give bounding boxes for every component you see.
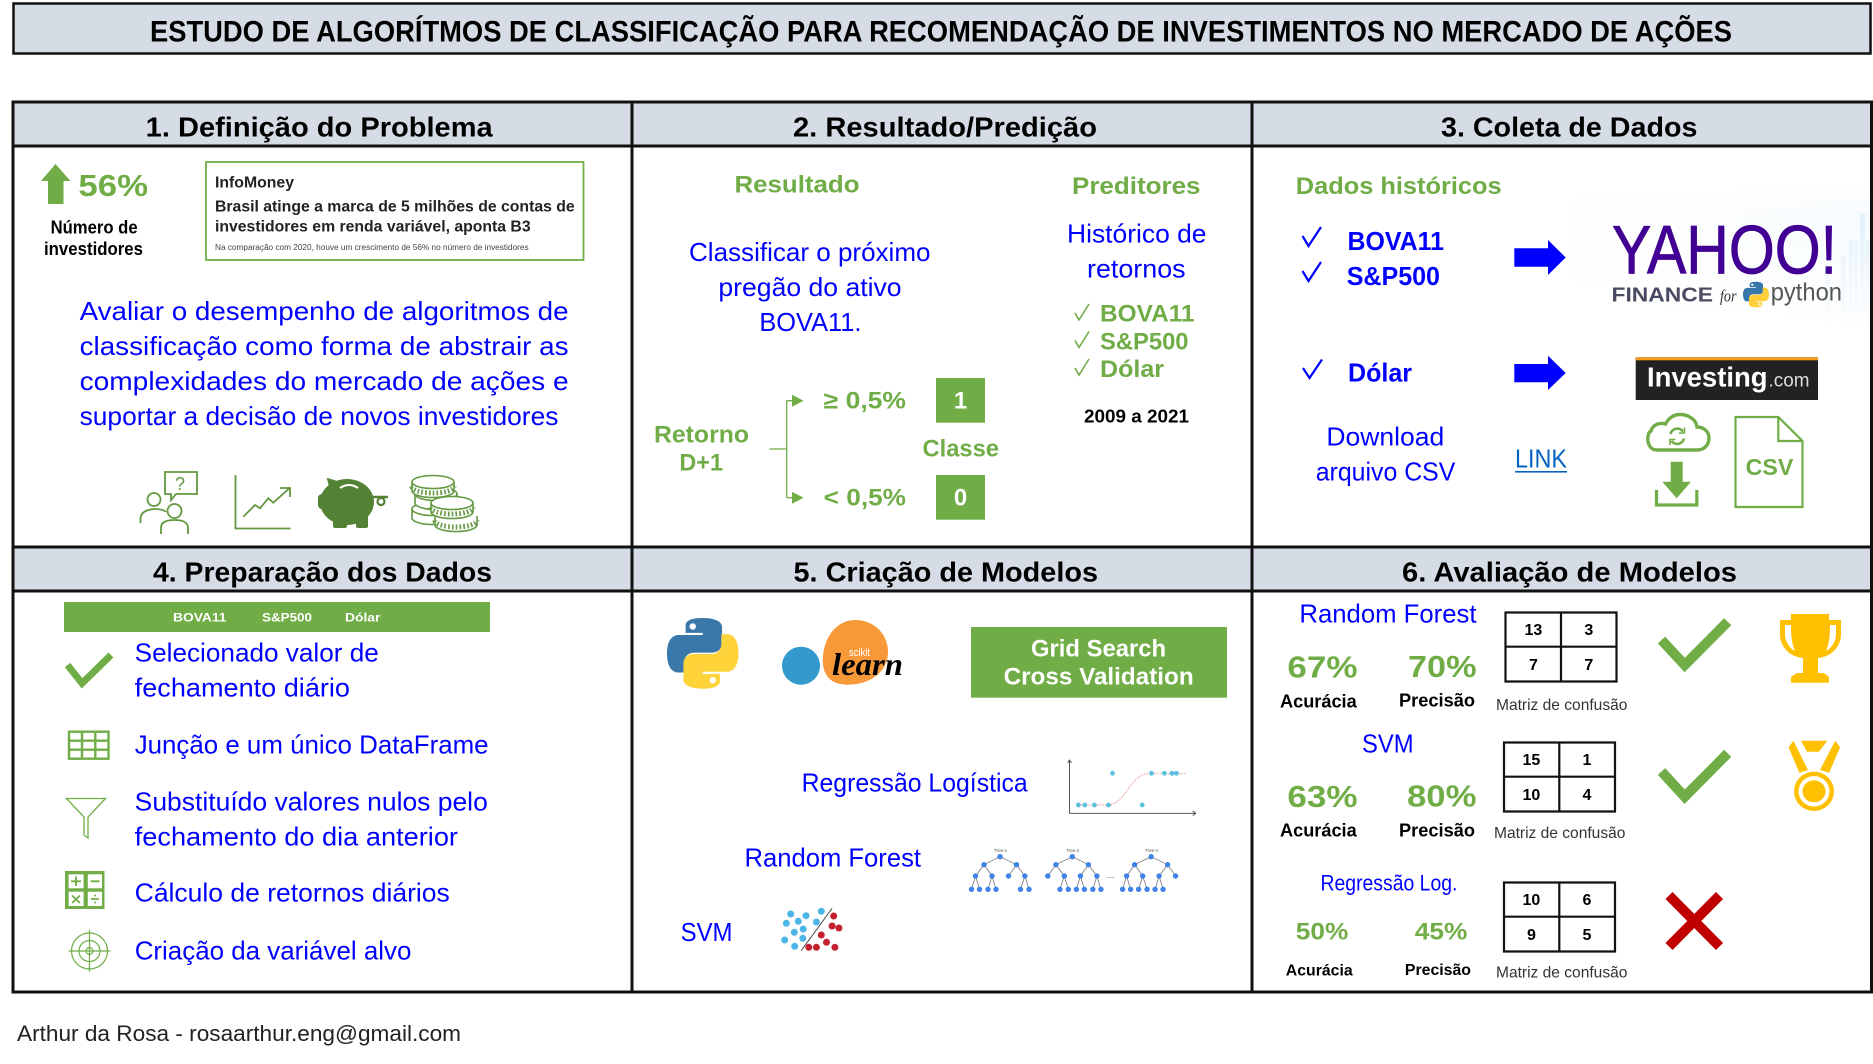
column bar: S&P500 [262,611,312,625]
objective text: suportar a decisão de novos investidores [80,401,558,431]
class box 1 [936,378,985,423]
yahoo backdrop [1572,186,1870,330]
objective text: complexidades do mercado de ações e [80,366,569,396]
arrow: to yahoo [1514,240,1566,275]
predictors checklist [1075,301,1194,383]
confusion matrix: regressão log: 5 [1583,927,1592,944]
outcome text: Classificar o próximo [689,237,930,267]
news callout: Brasil atinge a marca de 5 milhões de contas de [215,199,575,216]
step: substituído: Substituído valores nulos pelo [135,787,488,817]
class label: Classe [922,436,999,463]
panel: 4. preparação dos dados [13,547,632,992]
step: cálculo: Cálculo de retornos diários [135,878,450,908]
objective text: classificação como forma de abstrair as [80,331,569,361]
grid search box [971,627,1227,698]
predictors text: Histórico de [1067,218,1206,248]
news callout [206,162,584,260]
heading: 3. Coleta de Dados [1441,112,1697,143]
model: random forest [1280,599,1477,712]
class box 1: 1 [954,387,967,414]
icon: investors question: ? [175,474,185,494]
stat: 56%: 56% [78,168,148,203]
objective text [80,296,569,431]
column bar [64,602,490,632]
title: ESTUDO DE ALGORÍTMOS DE CLASSIFICAÇÃO PARA RECOMENDAÇÃO DE INVESTIMENTOS NO MERCADO DE AÇÕES [150,15,1732,49]
model: random forest: Precisão [1399,691,1475,711]
column bar: BOVA11 [173,611,227,625]
confusion matrix: regressão log: Matriz de confusão [1496,964,1627,981]
outcome text: BOVA11. [759,307,861,337]
model: random forest: Random Forest [1299,599,1477,629]
icon: big check [1662,622,1728,665]
download text [1316,422,1456,487]
logo: yahoo finance for python: YAHOO! [1612,211,1837,288]
step: selecionado: fechamento diário [135,673,350,703]
yahoo sources [1302,226,1444,291]
label: svm: SVM [681,917,732,947]
icon: download [1656,462,1697,505]
class box 0: 0 [954,484,967,511]
step: criação: Criação da variável alvo [135,935,411,965]
chart: random forest trees: Tree-2 [1066,848,1080,853]
predictors text: retornos [1087,253,1186,283]
icon: trophy [1780,614,1841,683]
confusion matrix: random forest [1496,612,1627,714]
chart: logistic curve [1068,760,1196,816]
outcome text: pregão do ativo [718,272,902,302]
chart: random forest trees: Tree-1 [994,848,1008,853]
confusion matrix: svm: Matriz de confusão [1494,825,1625,842]
chart: random forest trees [969,848,1178,892]
icon: check [68,655,111,683]
icon: medal [1789,741,1840,811]
heading: 6. Avaliação de Modelos [1402,557,1737,588]
confusion matrix: svm [1494,742,1625,842]
target label [654,422,749,476]
arrow: to investing [1514,356,1566,390]
yahoo sources: BOVA11 [1348,226,1444,256]
download text: arquivo CSV [1316,457,1456,487]
icon: csv file: CSV [1746,454,1794,480]
logo: python [667,618,738,689]
confusion matrix: regressão log: 6 [1583,892,1592,909]
predictors checklist: Dólar [1100,356,1164,383]
panel: 2. resultado/predição [632,102,1252,547]
predictors text [1067,218,1206,283]
model: svm: 63% [1287,779,1358,814]
step: junção: Junção e um único DataFrame [135,729,489,759]
logo: yahoo finance for python: for [1720,287,1737,306]
model: random forest: 67% [1287,650,1358,685]
icon: coins [412,476,477,532]
stat label [44,217,143,259]
model: random forest: Acurácia [1280,692,1358,712]
footer: Arthur da Rosa - rosaarthur.eng@gmail.com [17,1021,461,1046]
threshold labels [824,387,906,511]
target label: D+1 [679,449,723,476]
download text: Download [1326,422,1444,452]
logo: yahoo finance for python: python [1771,279,1842,307]
panel: 1. definição do problema [13,102,632,547]
chart: random forest trees: Tree-n [1145,848,1159,853]
objective text: Avaliar o desempenho de algoritmos de [80,296,569,326]
grid search box: Grid Search [1031,636,1166,663]
period: 2009 a 2021 [1084,407,1189,427]
confusion matrix: random forest: 3 [1584,622,1593,639]
arrow: branch [769,395,804,504]
model: random forest: 70% [1408,649,1476,684]
model: regressão log: 50% [1296,918,1348,945]
model: svm: Acurácia [1280,821,1358,841]
model: regressão log: Regressão Log. [1320,871,1457,896]
confusion matrix: regressão log [1496,882,1627,981]
step: substituído [135,787,488,852]
icon: cloud sync [1648,414,1709,450]
icon: up arrow [41,164,70,204]
confusion matrix: svm: 15 [1523,752,1540,769]
panel: 5. criação de modelos [632,547,1252,992]
confusion matrix: random forest: Matriz de confusão [1496,697,1627,714]
confusion matrix: svm: 1 [1583,752,1592,769]
model: svm: SVM [1362,729,1414,759]
logo: investing.com: Investing [1647,362,1768,393]
confusion matrix: svm: 4 [1583,787,1592,804]
subheading: Dados históricos [1296,173,1502,200]
news callout: Na comparação com 2020, houve um crescimento de 56% no número de investidores [215,243,529,252]
logo: scikit-learn: scikit [849,647,870,659]
step: selecionado: Selecionado valor de [135,638,379,668]
heading: 1. Definição do Problema [146,112,493,143]
yahoo sources: S&P500 [1347,261,1440,291]
news callout: InfoMoney [215,174,294,191]
confusion matrix: svm: 10 [1523,787,1540,804]
threshold labels: < 0,5% [824,484,906,511]
model: svm: 80% [1407,778,1476,813]
dolar source: Dólar [1348,358,1412,388]
confusion matrix: random forest: 7 [1529,657,1538,674]
icon: growth chart [236,475,290,528]
grid search box: Cross Validation [1004,663,1194,690]
logo: scikit-learn: learn [832,646,903,682]
icon: red x [1669,896,1720,946]
confusion matrix: regressão log: 10 [1523,892,1540,909]
heading: 4. Preparação dos Dados [153,557,492,588]
confusion matrix: random forest: 7 [1584,657,1593,674]
logo: yahoo finance for python: FINANCE [1612,284,1713,307]
heading: 2. Resultado/Predição [793,112,1097,143]
heading: 5. Criação de Modelos [794,557,1098,588]
step: selecionado [135,638,379,703]
threshold labels: ≥ 0,5% [824,387,906,414]
logo: scikit-learn [782,620,903,685]
model: regressão log: 45% [1415,918,1467,945]
model: svm: Precisão [1399,821,1475,841]
dolar source [1303,358,1412,388]
confusion matrix: regressão log: 9 [1527,927,1536,944]
label: regressão logística: Regressão Logística [802,768,1028,798]
confusion matrix: random forest: 13 [1525,622,1542,639]
subheading: preditores: Preditores [1072,173,1200,200]
class box 0 [936,475,985,520]
subheading: resultado: Resultado [734,172,860,199]
icon: table [69,732,108,759]
model: regressão log: Acurácia [1286,963,1353,980]
stat label: Número de [51,217,138,237]
outcome text [689,237,930,337]
model: svm [1280,729,1476,841]
icon: calculator [65,871,104,909]
target label: Retorno [654,422,749,449]
stat label: investidores [44,239,143,259]
icon: investors question [140,472,197,534]
link: LINK [1515,444,1568,474]
model: regressão log: Precisão [1405,962,1471,979]
logo: investing.com [1636,357,1818,400]
model: regressão log [1286,871,1471,980]
label: random forest: Random Forest [744,843,922,873]
predictors checklist: S&P500 [1100,329,1188,356]
icon: big check [1662,753,1728,797]
panel: 3. coleta de dados [1252,102,1872,547]
column bar: Dólar [345,611,381,625]
chart: random forest trees: ... [1107,870,1115,880]
icon: piggy bank [318,478,388,528]
icon: funnel [66,798,106,838]
title [14,4,1870,54]
predictors checklist: BOVA11 [1100,301,1194,328]
news callout: investidores em renda variável, aponta B3 [215,219,531,236]
step: substituído: fechamento do dia anterior [135,822,458,852]
panel: 6. avaliação de modelos [1252,547,1872,992]
icon: csv file [1736,417,1802,507]
chart: svm scatter [781,908,842,951]
icon: target [69,930,110,972]
logo: investing.com: .com [1768,371,1810,392]
